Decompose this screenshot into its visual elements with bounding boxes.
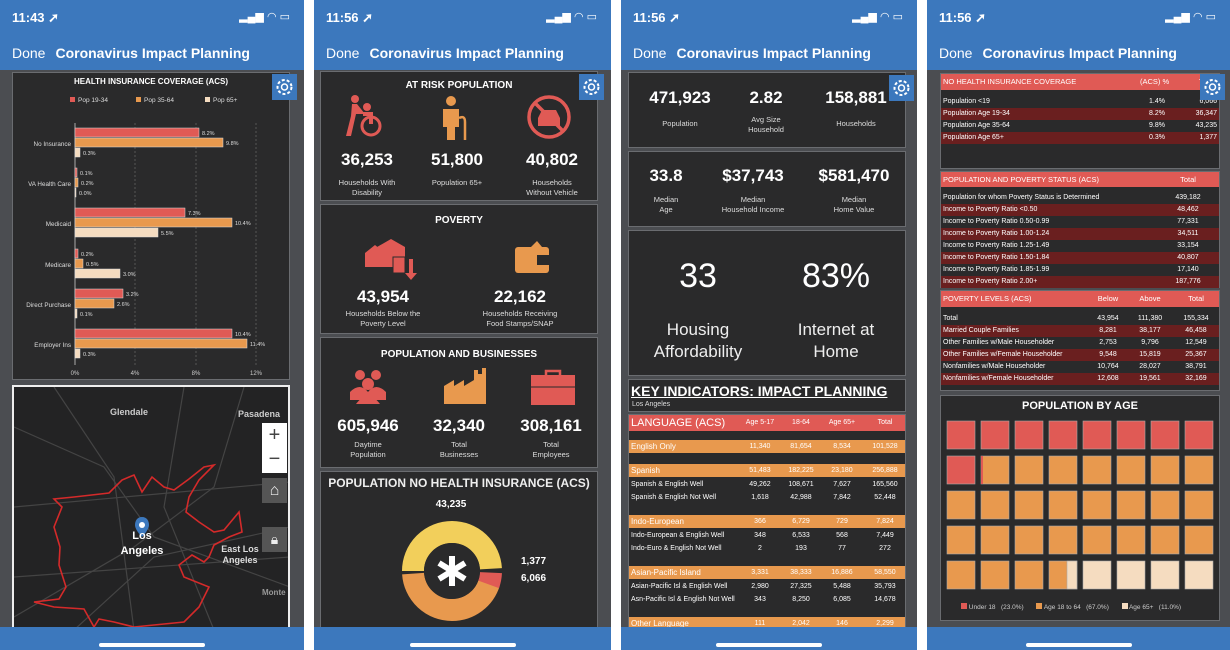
phone 4: insurance and poverty tables, waffle chart [927,0,1230,650]
icon: gear [579,74,604,100]
header: Done Coronavirus Impact Planning [633,45,871,61]
panel: poverty: Households Receiving [483,309,557,318]
icon: lock: 🔒︎ [271,531,278,547]
language table: 8,534 [833,443,851,450]
header [621,0,917,70]
icon: wheelchair [346,95,382,136]
panel: health insurance coverage chart: 0.1% [80,171,93,177]
language table: 6,533 [792,532,810,539]
table: population and poverty status: Income to Poverty Ratio 0.50-0.99 [943,218,1049,225]
language table: 7,627 [833,481,851,488]
panel: at risk population: 36,253 [341,150,393,169]
table: poverty levels: Total [1188,294,1204,303]
table: population and poverty status: 77,331 [1177,218,1199,225]
panel: key indicators title [628,379,906,412]
table: poverty levels: Other Families w/Male Householder [943,339,1054,346]
map panel: Glendale [110,407,148,417]
table: poverty levels [940,290,1220,391]
phone 1: health insurance chart and map [0,0,304,650]
panel: median stats [628,151,906,227]
table: no health insurance coverage: T [1199,77,1204,86]
panel: health insurance coverage chart: 8% [192,371,201,377]
panel: population and businesses [320,337,598,468]
panel: health insurance coverage chart: Employer Ins [34,342,71,349]
table: no health insurance coverage: 9.8% [1149,122,1165,129]
panel: population stats: Population [662,119,698,128]
language table: 7,449 [876,532,894,539]
icon: gear [889,75,914,101]
language table: Spanish [631,466,660,475]
zoom controls: + [269,424,280,446]
table: poverty levels: 9,796 [1141,339,1159,346]
table: poverty levels: POVERTY LEVELS (ACS) [943,294,1032,303]
table: poverty levels: 46,458 [1185,327,1207,334]
language table: 1,618 [751,494,769,501]
language table: 77 [838,545,846,552]
language table: Other Language [631,619,689,628]
language table: 7,842 [833,494,851,501]
panel: median stats: Median [842,195,866,204]
panel: housing and internet: Home [813,342,859,361]
panel: poverty: 22,162 [494,287,546,306]
panel: housing and internet [628,230,906,376]
panel: health insurance coverage chart: 0.3% [83,352,96,358]
map panel: Los [132,530,152,542]
panel: population by age waffle chart [940,395,1220,621]
panel: housing and internet: Affordability [654,342,742,361]
panel: population no health insurance donut: 1,377 [521,556,546,567]
table: no health insurance coverage: 8.2% [1149,110,1165,117]
language table: 2,042 [792,620,810,627]
language table: Asian-Pacific Island [631,568,701,577]
panel: health insurance coverage chart: 10.4% [235,221,251,227]
panel: population and businesses: Total [451,440,467,449]
map panel: Angeles [222,555,258,565]
zoom controls [262,423,287,473]
language table: Spanish & English Not Well [631,494,716,501]
table: poverty levels: 32,169 [1185,375,1207,382]
panel: health insurance coverage chart: 3.0% [123,272,136,278]
panel: key indicators title: KEY INDICATORS: IMPACT PLANNING [631,383,887,399]
panel: population and businesses: Businesses [440,450,478,459]
table: population and poverty status [940,171,1220,288]
icon: wallet [515,241,549,273]
header: 11:43 ➚ [12,10,59,25]
panel: median stats: Median [654,195,678,204]
language table: 18-64 [792,419,810,426]
map panel [12,385,290,630]
panel: health insurance coverage chart: 8.2% [202,131,215,137]
panel: at risk population: 51,800 [431,150,483,169]
table: no health insurance coverage: 0.3% [1149,134,1165,141]
panel: median stats: Home Value [834,205,874,214]
header [0,0,304,70]
table: no health insurance coverage: 43,235 [1196,122,1217,129]
panel: health insurance coverage chart: 12% [250,371,263,377]
panel: housing and internet: Internet at [798,320,874,339]
table: population and poverty status: Population for whom Poverty Status is Determined [943,194,1099,201]
panel: health insurance coverage chart: 10.4% [235,332,251,338]
table: no health insurance coverage: 1,377 [1199,134,1217,141]
panel: population stats: Avg Size [751,115,781,124]
header: ▂▄▆ ◠ ▭ [852,11,903,23]
language table: 5,488 [833,583,851,590]
language table: Total [878,419,892,426]
language table: 729 [836,518,848,525]
panel: health insurance coverage chart: No Insurance [34,141,71,148]
panel: poverty: Food Stamps/SNAP [486,319,554,328]
table: poverty levels: Married Couple Families [943,327,1019,334]
language table [628,414,906,644]
header: Done Coronavirus Impact Planning [12,45,250,61]
panel: health insurance coverage chart: 9.8% [226,141,239,147]
language table: 568 [836,532,848,539]
panel: population stats: Household [748,125,784,134]
table: poverty levels: Total [943,315,958,322]
panel: population stats: 2.82 [749,88,783,107]
language table: Indo-European [631,517,684,526]
panel: health insurance coverage chart: 0.3% [83,151,96,157]
table: population and poverty status: 33,154 [1177,242,1199,249]
panel: health insurance coverage chart: Pop 65+ [213,97,238,104]
panel: population and businesses: Population [350,450,386,459]
panel: median stats: $37,743 [722,166,784,185]
panel: health insurance coverage chart: 0.2% [81,252,94,258]
icon: no vehicle [527,95,571,139]
language table: 2,299 [876,620,894,627]
table: population and poverty status: 439,182 [1175,194,1201,201]
panel: population and businesses: Employees [532,450,570,459]
panel: population stats [628,72,906,148]
panel: health insurance coverage chart: Medicaid [46,221,71,228]
language table: 343 [754,596,766,603]
panel: population and businesses: 308,161 [520,416,582,435]
table: poverty levels: 12,549 [1185,339,1207,346]
icon: home: ⌂ [270,482,279,499]
language table: 11,340 [750,443,770,450]
panel: health insurance coverage chart: 0.0% [79,191,92,197]
header: ▂▄▆ ◠ ▭ [239,11,290,23]
language table: 6,729 [792,518,810,525]
panel: health insurance coverage chart: 11.4% [250,342,265,348]
language table: 108,671 [788,481,814,488]
header [314,0,611,70]
table: no health insurance coverage: 1.4% [1149,98,1165,105]
panel: poverty: Poverty Level [360,319,406,328]
language table: 51,483 [749,467,771,474]
panel: at risk population: Without Vehicle [526,188,578,197]
panel: median stats: Household Income [722,205,784,214]
panel: health insurance coverage chart: Pop 19-34 [78,97,108,104]
language table: 182,225 [788,467,814,474]
panel: poverty [320,204,598,334]
header [927,0,1230,70]
icon: home [262,478,287,503]
language table: 2 [758,545,762,552]
panel: health insurance coverage chart: Direct Purchase [26,302,71,309]
panel: at risk population [320,71,598,201]
table: poverty levels: 43,954 [1097,315,1119,322]
panel: health insurance coverage chart: 7.3% [188,211,201,217]
table: population and poverty status: POPULATION AND POVERTY STATUS (ACS) [943,175,1099,184]
language table: Age 5-17 [746,419,774,426]
phone 2: at risk, poverty, businesses, donut [314,0,611,650]
table: poverty levels: Nonfamilies w/Male Householder [943,363,1045,370]
language table: 52,448 [874,494,896,501]
table: population and poverty status: 48,462 [1177,206,1199,213]
language table: 7,824 [876,518,894,525]
header: Done Coronavirus Impact Planning [326,45,564,61]
panel: at risk population: AT RISK POPULATION [406,80,512,91]
language table: 38,333 [790,569,812,576]
language table: 8,250 [792,596,810,603]
panel: population and businesses: Total [543,440,559,449]
table: population and poverty status: 17,140 [1177,266,1199,273]
panel: health insurance coverage chart: 0.1% [80,312,93,318]
language table: 146 [836,620,848,627]
language table: 49,262 [749,481,771,488]
language table: 165,560 [872,481,898,488]
table: population and poverty status: 187,776 [1175,278,1201,285]
icon: people [350,370,386,404]
legend: Under 18 (23.0%) Age 18 to 64 (67.0%) Age 65+ (11.0%) [969,604,1181,611]
icon: elderly [443,96,466,140]
table: poverty levels: Other Families w/Female Householder [943,351,1062,358]
table: poverty levels: 155,334 [1183,315,1209,322]
language table: 193 [795,545,807,552]
header: 11:56 ➚ [633,10,680,25]
table: no health insurance coverage: 6,066 [1199,98,1217,105]
panel: median stats: Median [741,195,765,204]
icon: gear [272,74,297,100]
language table: 366 [754,518,766,525]
map panel: Angeles [121,545,163,557]
table: population and poverty status: Income to Poverty Ratio 1.25-1.49 [943,242,1049,249]
table: no health insurance coverage: Population <19 [943,98,990,105]
header: 11:56 ➚ [939,10,986,25]
language table: 58,550 [874,569,896,576]
table: poverty levels: 111,380 [1138,315,1162,322]
panel: population and businesses: POPULATION AND BUSINESSES [381,349,537,360]
table: population and poverty status: Total [1180,175,1196,184]
table: poverty levels: 12,608 [1097,375,1119,382]
panel: health insurance coverage chart: VA Health Care [28,181,71,188]
language table: 23,180 [831,467,853,474]
language table: Spanish & English Well [631,481,703,488]
panel: population no health insurance donut: POPULATION NO HEALTH INSURANCE (ACS) [328,476,590,490]
panel: population no health insurance donut: 6,066 [521,573,546,584]
panel: health insurance coverage chart: 5.5% [161,231,174,237]
panel: health insurance coverage chart [12,72,290,380]
table: population and poverty status: Income to Poverty Ratio 1.00-1.24 [943,230,1049,237]
table: no health insurance coverage: (ACS) % [1140,77,1169,86]
header: ▂▄▆ ◠ ▭ [546,11,597,23]
table: poverty levels: 38,791 [1185,363,1207,370]
header: Done Coronavirus Impact Planning [939,45,1177,61]
panel: population no health insurance donut [320,471,598,641]
map panel: Monte [262,588,286,597]
table: population and poverty status: Income to Poverty Ratio 1.50-1.84 [943,254,1049,261]
language table: Indo-European & English Well [631,532,724,539]
table: poverty levels: 9,548 [1099,351,1117,358]
panel: health insurance coverage chart: 0.5% [86,262,99,268]
panel: population stats: 471,923 [649,88,711,107]
table: no health insurance coverage: Population Age 65+ [943,134,1004,141]
language table: Asn-Pacific Isl & English Not Well [631,596,735,603]
panel: at risk population: Households With [339,178,395,187]
map panel: Pasadena [238,409,281,419]
map panel: East Los [221,544,259,554]
language table: English Only [631,442,676,451]
table: poverty levels: 19,561 [1139,375,1161,382]
language table: 2,980 [751,583,769,590]
panel: health insurance coverage chart: Pop 35-64 [144,97,174,104]
panel: at risk population: 40,802 [526,150,578,169]
language table: 3,331 [751,569,769,576]
panel: population by age waffle chart: POPULATION BY AGE [1022,400,1138,412]
language table: 6,085 [833,596,851,603]
language table: 81,654 [790,443,812,450]
language table: 348 [754,532,766,539]
table: population and poverty status: 34,511 [1178,230,1198,237]
panel: health insurance coverage chart: 2.6% [117,302,130,308]
icon: gear [1200,74,1225,100]
panel: population and businesses: 32,340 [433,416,485,435]
table: no health insurance coverage: 36,347 [1196,110,1217,117]
language table: Indo-Euro & English Not Well [631,545,722,552]
table: poverty levels: 10,764 [1097,363,1119,370]
panel: health insurance coverage chart: 4% [131,371,140,377]
panel: housing and internet: Housing [667,320,729,339]
language table: 111 [755,620,765,627]
panel: key indicators title: Los Angeles [632,401,670,408]
panel: health insurance coverage chart: Medicare [45,262,71,269]
table: population and poverty status: Income to Poverty Ratio 2.00+ [943,278,1037,285]
panel: health insurance coverage chart: 3.2% [126,292,139,298]
icon: factory [444,368,486,404]
panel: median stats: $581,470 [819,166,889,185]
table: poverty levels: 15,819 [1139,351,1161,358]
table: poverty levels: Below [1098,294,1118,303]
panel: housing and internet: 83% [802,257,870,295]
header: ▂▄▆ ◠ ▭ [1165,11,1216,23]
language table: LANGUAGE (ACS) [631,417,725,429]
icon: houses with arrow [365,239,417,280]
table: population and poverty status: 40,807 [1177,254,1199,261]
table: poverty levels: 25,367 [1185,351,1207,358]
table: poverty levels: 2,753 [1099,339,1117,346]
panel: poverty: 43,954 [357,287,409,306]
language table: 16,886 [831,569,853,576]
table: poverty levels: 8,281 [1099,327,1117,334]
language table: Asian-Pacific Isl & English Well [631,583,727,590]
table: no health insurance coverage: Population Age 19-34 [943,110,1010,117]
table: poverty levels: Above [1139,294,1161,303]
panel: at risk population: Disability [352,188,382,197]
header: 11:56 ➚ [326,10,373,25]
language table: 42,988 [790,494,812,501]
table: no health insurance coverage: Population Age 35-64 [943,122,1010,129]
panel: health insurance coverage chart: 0% [71,371,80,377]
table: poverty levels: 28,027 [1139,363,1161,370]
panel: at risk population: Population 65+ [432,178,482,187]
language table: 101,528 [872,443,898,450]
table: poverty levels: 38,177 [1139,327,1161,334]
language table: 256,888 [872,467,898,474]
language table: 272 [879,545,891,552]
panel: housing and internet: 33 [679,257,717,295]
panel: population stats: Households [836,119,876,128]
panel: poverty: Households Below the [346,309,420,318]
table: poverty levels: Nonfamilies w/Female Householder [943,375,1054,382]
icon: lock [262,527,287,552]
panel: median stats: Age [659,205,673,214]
table: population and poverty status: Income to Poverty Ratio <0.50 [943,206,1037,213]
phone 3: key numbers and language table [621,0,917,650]
panel: population and businesses: 605,946 [337,416,399,435]
language table: 27,325 [790,583,812,590]
panel: population and businesses: Daytime [354,440,382,449]
panel: population no health insurance donut: 43,235 [436,499,466,510]
table: population and poverty status: Income to Poverty Ratio 1.85-1.99 [943,266,1049,273]
language table: 14,678 [874,596,896,603]
panel: median stats: 33.8 [649,166,683,185]
panel: health insurance coverage chart: HEALTH INSURANCE COVERAGE (ACS) [74,77,228,86]
table: no health insurance coverage [940,73,1220,169]
panel: poverty: POVERTY [435,215,483,226]
zoom controls: − [269,448,280,470]
donut chart [402,521,502,621]
language table: Age 65+ [829,419,855,426]
language table: 35,793 [874,583,896,590]
panel: population stats: 158,881 [825,88,887,107]
icon: briefcase [531,370,575,405]
table: no health insurance coverage: NO HEALTH INSURANCE COVERAGE [943,77,1076,86]
panel: at risk population: Households [532,178,572,187]
panel: health insurance coverage chart: 0.2% [81,181,94,187]
